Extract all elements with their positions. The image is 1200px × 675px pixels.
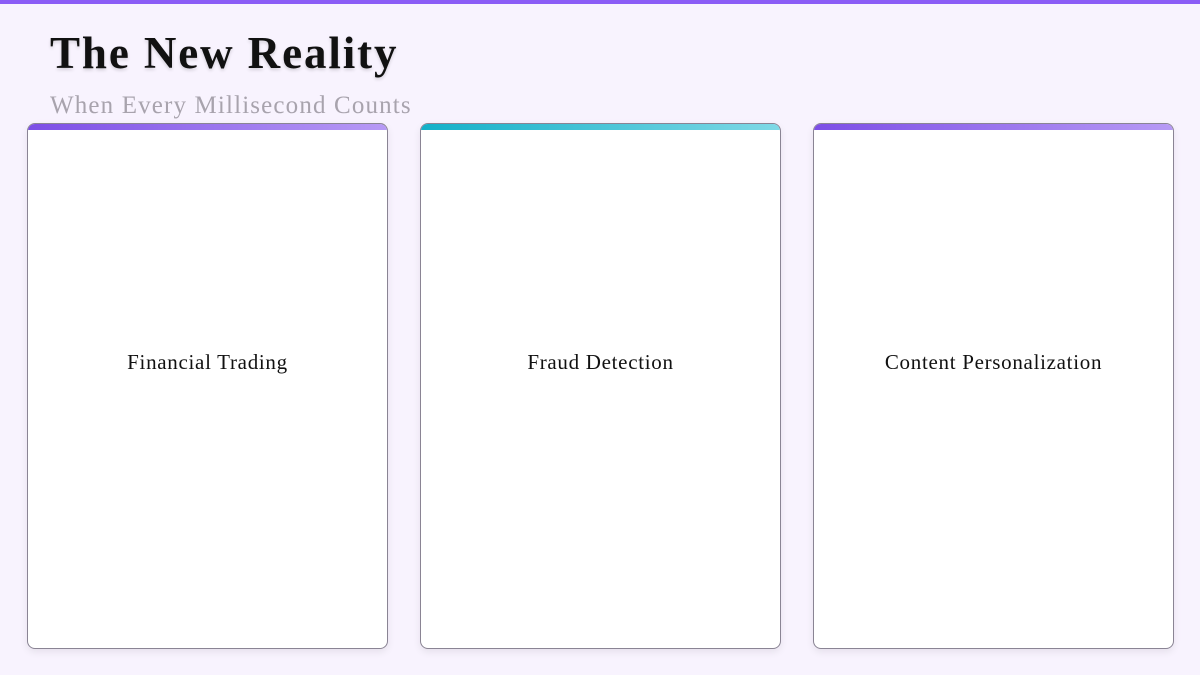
label: financial trading: Financial Trading bbox=[127, 350, 288, 374]
subtitle: When Every Millisecond Counts bbox=[50, 92, 412, 119]
panel: fraud detection bbox=[420, 123, 781, 649]
panel: financial trading bbox=[27, 123, 388, 649]
panel: content personalization bbox=[813, 123, 1174, 649]
label: content personalization: Content Personalization bbox=[885, 350, 1102, 374]
label: fraud detection: Fraud Detection bbox=[527, 350, 674, 374]
title: The New Reality bbox=[50, 28, 398, 78]
